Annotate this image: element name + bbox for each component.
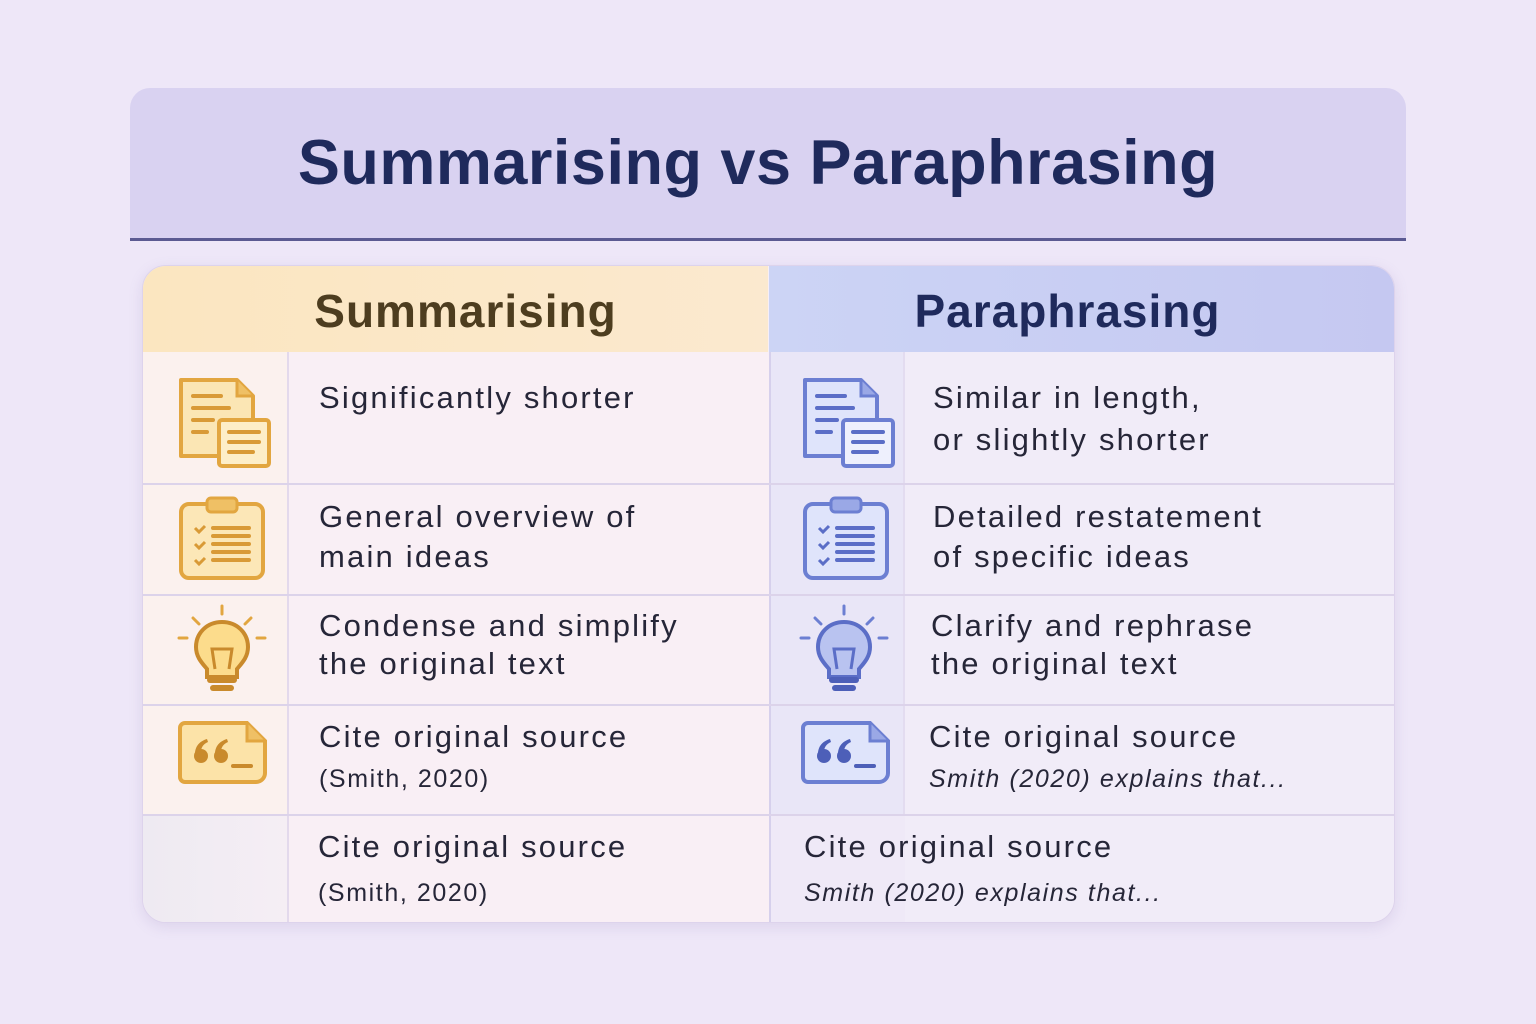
row3 right text: Clarify and rephrase	[931, 608, 1254, 643]
row1 right text: or slightly shorter	[933, 422, 1211, 457]
row1 right text: Similar in length,	[933, 380, 1202, 415]
row3 left text: Condense and simplify	[319, 608, 679, 643]
row2 left icon: clipboard checklist	[179, 496, 265, 580]
row1 right icon: documents	[803, 378, 895, 468]
row2 right text	[933, 499, 1263, 574]
row4 right text: Cite original source	[929, 719, 1238, 754]
row4 right text	[929, 719, 1287, 793]
row5 right text	[804, 829, 1162, 907]
row5 right text: Cite original source	[804, 829, 1113, 864]
row2 right text: Detailed restatement	[933, 499, 1263, 534]
row1 right text	[933, 380, 1211, 457]
row3 right text	[931, 608, 1254, 681]
comparison table	[142, 265, 1395, 923]
row2 right icon: clipboard checklist	[803, 496, 889, 580]
row4 left text: (Smith, 2020)	[319, 765, 490, 793]
row3 left text	[319, 608, 679, 681]
header: Paraphrasing	[769, 266, 1396, 352]
row3 right text: the original text	[931, 646, 1179, 681]
title banner	[130, 88, 1406, 241]
header: Summarising	[143, 266, 768, 352]
row4 right icon: quote	[801, 721, 890, 784]
row5 left text: (Smith, 2020)	[318, 879, 489, 907]
row3 right icon: lightbulb	[800, 604, 888, 691]
row3 left icon: lightbulb	[178, 604, 266, 691]
row2 left text	[319, 499, 636, 574]
row1 left text: Significantly shorter	[319, 380, 636, 415]
row2 left text: main ideas	[319, 539, 491, 574]
title banner: Summarising vs Paraphrasing	[298, 128, 1218, 198]
row2 left text: General overview of	[319, 499, 636, 534]
row4 right text: Smith (2020) explains that...	[929, 765, 1287, 793]
row4 left text	[319, 719, 628, 793]
header: Paraphrasing: Paraphrasing	[914, 285, 1220, 337]
row4 left text: Cite original source	[319, 719, 628, 754]
row5 left text	[318, 829, 627, 907]
row5 right text: Smith (2020) explains that...	[804, 879, 1162, 907]
row1 left icon: documents	[179, 378, 271, 468]
row5 left text: Cite original source	[318, 829, 627, 864]
row2 right text: of specific ideas	[933, 539, 1191, 574]
header: Summarising: Summarising	[314, 285, 617, 337]
row4 left icon: quote	[178, 721, 267, 784]
row3 left text: the original text	[319, 646, 567, 681]
